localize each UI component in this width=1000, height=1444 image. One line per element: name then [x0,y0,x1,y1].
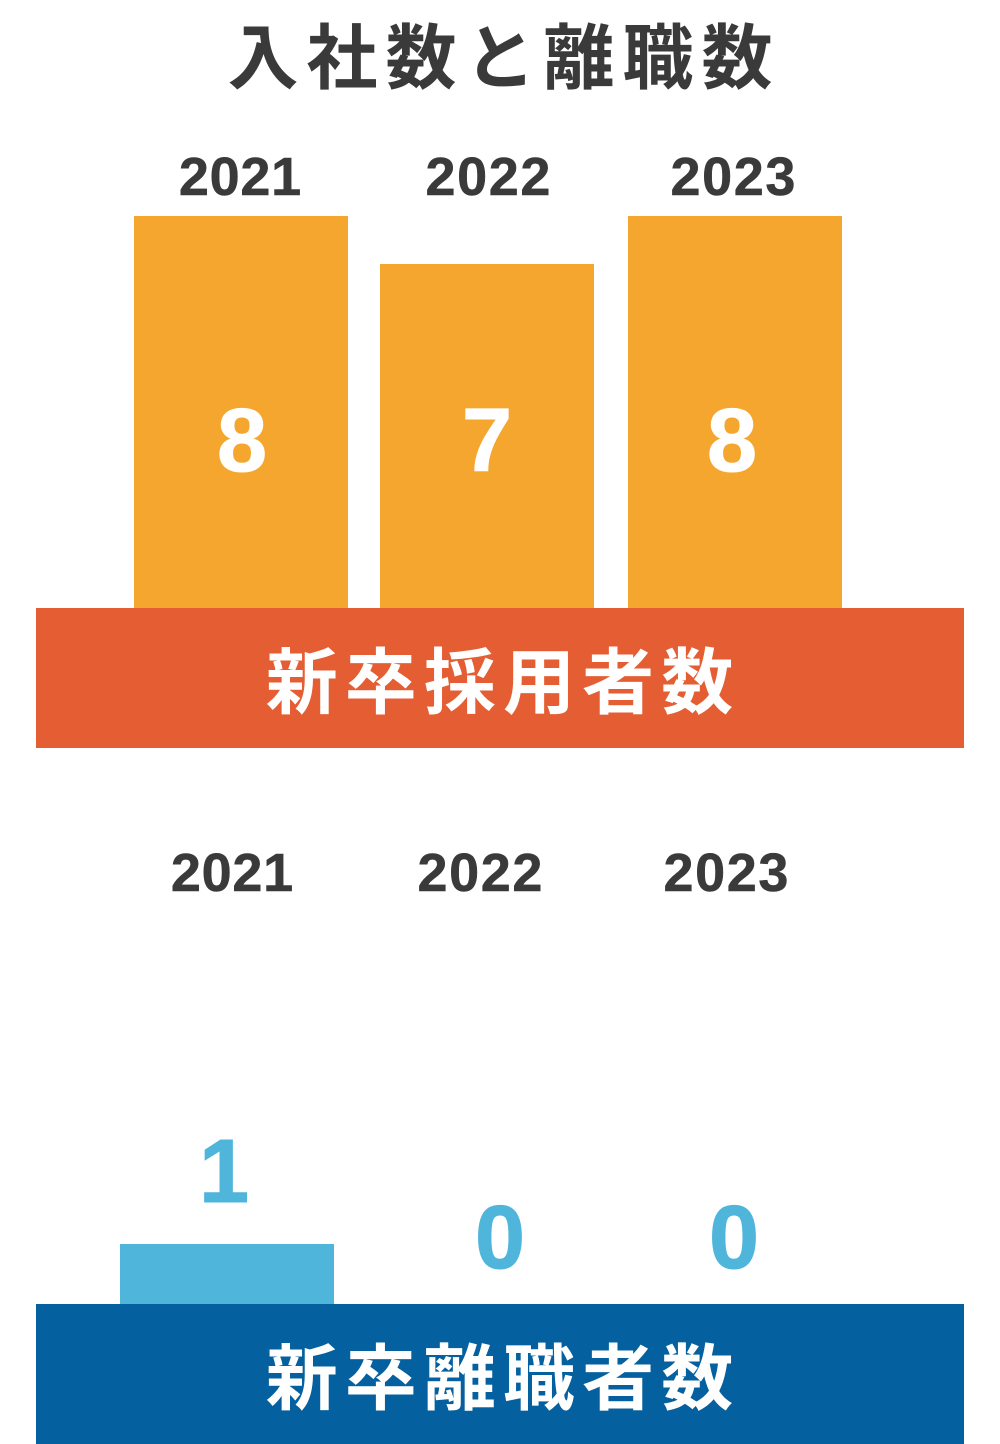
value 2023: 0 [709,1188,759,1288]
leavers band label: 新卒離職者数 [266,1340,740,1420]
value 2021: 1 [199,1122,249,1222]
panel: new graduate hires [36,147,964,748]
value 2021: 8 [217,391,267,491]
year label 2022: 2022 [418,843,544,903]
value 2022: 7 [462,391,512,491]
year label 2021: 2021 [179,147,302,207]
bar 2021 [120,1244,334,1304]
value 2023: 8 [707,391,757,491]
leavers base band [36,1304,964,1444]
bar 2023 [628,216,842,608]
hires band label: 新卒採用者数 [266,644,740,724]
bar 2022 [380,264,594,608]
year label 2023: 2023 [664,843,790,903]
bar 2021 [134,216,348,608]
year label 2022: 2022 [426,147,552,207]
hires base band [36,608,964,748]
title: 入社数と離職数 [227,20,780,99]
year label 2021: 2021 [171,843,294,903]
panel: new graduate leavers [36,843,964,1444]
value 2022: 0 [475,1188,525,1288]
year label 2023: 2023 [671,147,797,207]
